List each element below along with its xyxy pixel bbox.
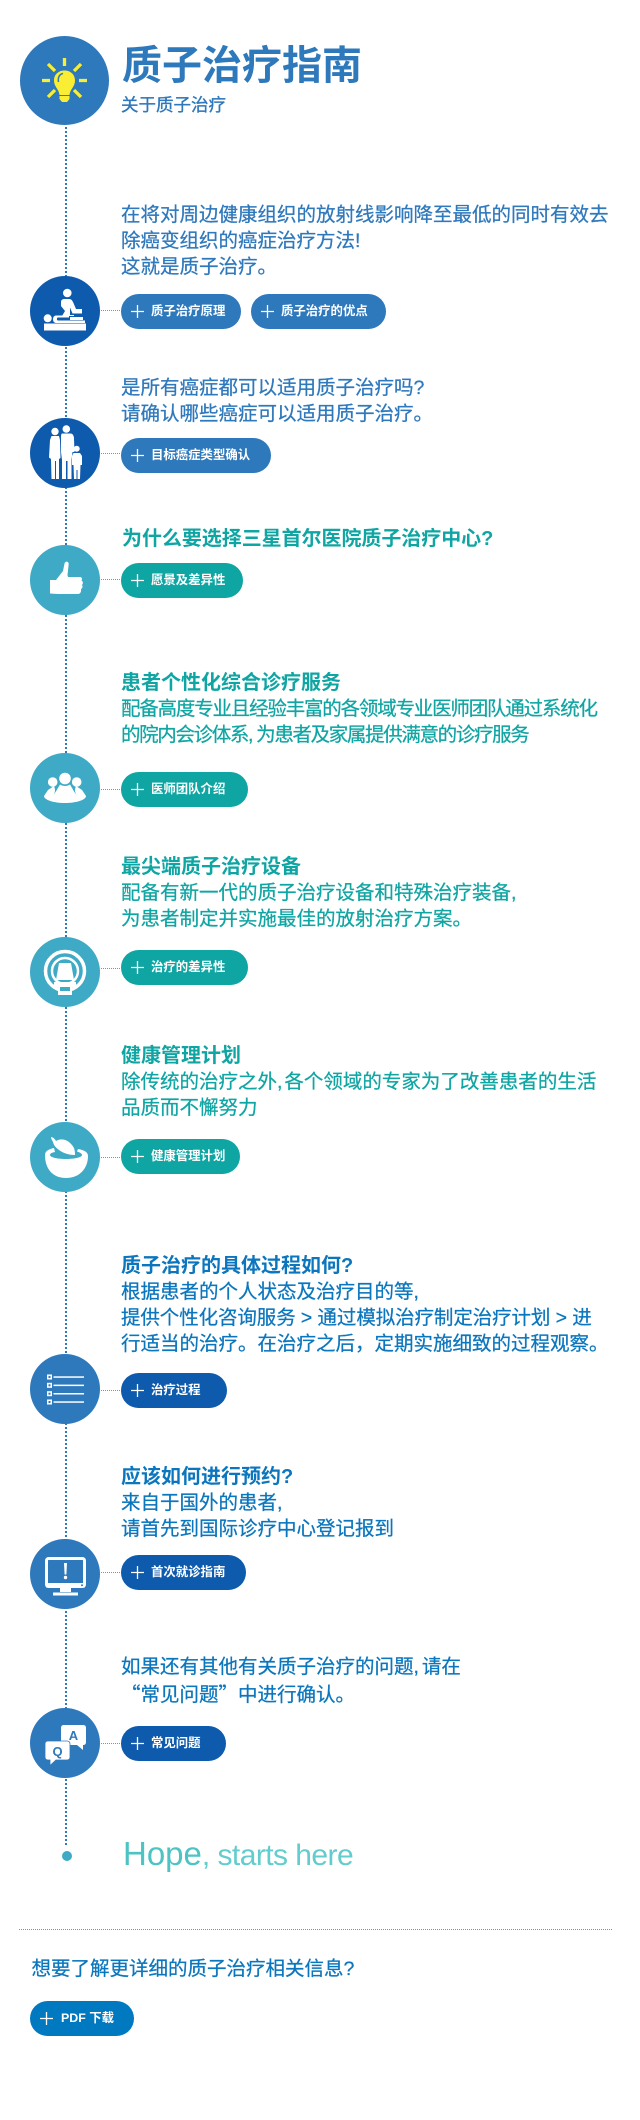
icon: Q and A bubbles [30,1708,100,1778]
icon: checklist [30,1354,100,1424]
text block: personalised care: 配备高度专业且经验丰富的各领域专业医师团队通过系统化 [121,698,597,720]
text block: FAQ prompt: 如果还有其他有关质子治疗的问题,请在 [121,1656,461,1678]
text block: applicable cancers [121,377,433,425]
icon: Q and A bubbles: A [69,1728,79,1743]
button: vision and differences [121,563,243,598]
text block: treatment process: 提供个性化咨询服务 > 通过模拟治疗制定治疗计划 > 进 [121,1307,592,1329]
text block: applicable cancers: 是所有癌症都可以适用质子治疗吗? [121,377,424,399]
button: FAQ: 常见问题 [151,1736,201,1750]
button: advantages of proton therapy [251,294,386,329]
text block: health management [121,1044,596,1119]
text block: FAQ prompt: “常见问题”中进行确认。 [121,1678,355,1707]
button: vision and differences: 愿景及差异性 [151,573,225,587]
text block: treatment process: 质子治疗的具体过程如何? [121,1255,353,1277]
text block: what is proton therapy: 除癌变组织的癌症治疗方法! [121,230,360,252]
button: physician team [121,772,248,807]
button: advantages of proton therapy: 质子治疗的优点 [281,304,368,318]
heading: want more information: 想要了解更详细的质子治疗相关信息? [32,1958,354,1980]
icon: monitor with alert [30,1539,100,1609]
icon: medical team [30,753,100,823]
text block: health management: 健康管理计划 [121,1045,241,1067]
text block: appointments: 应该如何进行预约? [121,1466,293,1488]
icon: massage treatment [30,276,100,346]
button: target cancer types: 目标癌症类型确认 [151,448,250,462]
icon: Q and A bubbles: Q [52,1744,63,1759]
button: treatment process: 治疗过程 [151,1383,201,1397]
button: principle of proton therapy: 质子治疗原理 [151,304,225,318]
button: health management plan [121,1139,240,1174]
text block: advanced equipment [121,856,516,930]
text block: personalised care: 的院内会诊体系, 为患者及家属提供满意的诊疗服务 [121,724,528,746]
text block: FAQ prompt [121,1656,461,1707]
text block: advanced equipment: 配备有新一代的质子治疗设备和特殊治疗装备, [121,882,516,904]
text block: applicable cancers: 请确认哪些癌症可以适用质子治疗。 [121,403,433,425]
text block: advanced equipment: 为患者制定并实施最佳的放射治疗方案。 [121,908,472,930]
text block: advanced equipment: 最尖端质子治疗设备 [121,856,301,878]
text block: health management: 品质而不懈努力 [121,1097,258,1119]
icon: bowl with leaf [30,1122,100,1192]
button: treatment process [121,1373,227,1408]
icon: family [30,418,100,488]
text block: treatment process: 行适当的治疗。在治疗之后，定期实施细致的过程观察。 [121,1333,609,1355]
text block: appointments: 来自于国外的患者, [121,1492,282,1514]
title: 质子治疗指南 [122,44,362,88]
text block: appointments: 请首先到国际诊疗中心登记报到 [121,1518,394,1540]
icon: light bulb [20,36,109,125]
text block: treatment process [121,1254,609,1355]
button: target cancer types [121,438,271,473]
subtitle: 关于质子治疗 [121,95,226,115]
text block: appointments [121,1466,394,1540]
text block: treatment process: 根据患者的个人状态及治疗目的等, [121,1281,419,1303]
text block: personalised care [121,672,598,746]
text block: what is proton therapy [121,204,609,278]
button: FAQ [121,1726,226,1761]
icon: proton therapy machine [30,937,100,1007]
text block: personalised care: 患者个性化综合诊疗服务 [121,672,341,694]
heading: why choose Samsung Seoul: 为什么要选择三星首尔医院质子治疗中心? [122,528,493,550]
button: first visit guide [121,1555,246,1590]
text block: what is proton therapy: 这就是质子治疗。 [121,256,277,278]
button: physician team: 医师团队介绍 [151,782,225,796]
slogan: Hope, starts here [123,1835,353,1872]
button: treatment differences [121,950,248,985]
icon: thumbs up [30,545,100,615]
button: principle of proton therapy [121,294,241,329]
text block: what is proton therapy: 在将对周边健康组织的放射线影响降至最低的同时有效去 [121,204,609,226]
button: PDF download: PDF 下载 [61,2011,114,2025]
text block: health management: 除传统的治疗之外,各个领域的专家为了改善患者的生活 [121,1071,596,1093]
button: PDF download [30,2001,134,2036]
button: treatment differences: 治疗的差异性 [151,960,225,974]
button: first visit guide: 首次就诊指南 [151,1565,225,1579]
button: health management plan: 健康管理计划 [151,1149,225,1163]
